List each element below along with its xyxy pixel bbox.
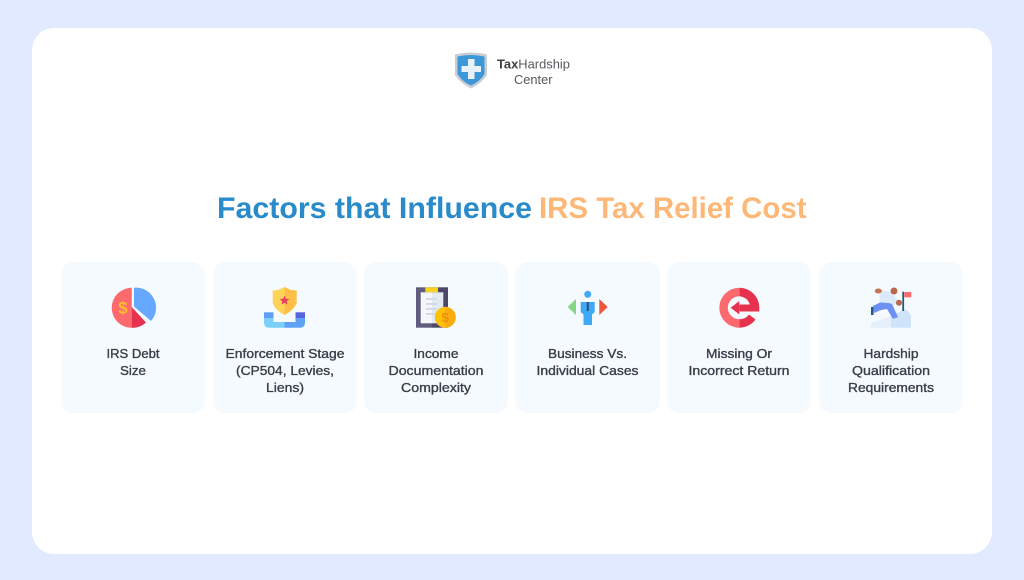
title: Factors that Influence	[217, 192, 532, 225]
label: IRS Debt	[106, 346, 160, 361]
label	[388, 346, 484, 395]
icon: climber with flag	[871, 288, 911, 328]
title: IRS Tax Relief Cost	[539, 192, 807, 225]
panel: Missing Or Incorrect Return	[667, 262, 811, 413]
icon: clipboard with coin: $	[442, 310, 450, 325]
panel: Income Documentation Complexity	[364, 262, 508, 413]
label: Size	[120, 363, 146, 378]
label: Individual Cases	[536, 363, 639, 378]
label: Complexity	[401, 380, 472, 395]
icon: pie chart with dollar	[112, 288, 156, 328]
label	[106, 346, 160, 378]
label	[536, 346, 639, 378]
panel: IRS Debt Size	[61, 262, 205, 413]
label	[226, 346, 344, 395]
icon: person between arrows	[568, 291, 608, 325]
icon: clipboard with coin	[416, 287, 456, 328]
label	[848, 346, 935, 395]
label: Requirements	[848, 380, 935, 395]
panel: Hardship Qualification Requirements	[819, 262, 963, 413]
logo	[455, 52, 570, 88]
logo text: Center	[514, 72, 553, 87]
icon: shield over tray	[264, 287, 305, 328]
label: Income	[414, 346, 458, 361]
panel: Enforcement Stage	[213, 262, 357, 413]
icon: e with return arrow	[719, 288, 759, 328]
label: Documentation	[388, 363, 484, 378]
logo text: TaxHardship	[497, 56, 570, 72]
label: (CP504, Levies,	[236, 363, 334, 378]
label: Business Vs.	[548, 346, 627, 361]
label: Hardship	[864, 346, 918, 361]
label: Missing Or	[706, 346, 773, 361]
logo text	[497, 56, 570, 87]
label	[688, 346, 790, 378]
icon: pie chart with dollar: $	[118, 298, 128, 318]
panel: Business Vs. Individual Cases	[515, 262, 660, 413]
label: Enforcement Stage	[226, 346, 344, 361]
title	[217, 192, 807, 225]
label: Liens)	[266, 380, 304, 395]
label: Qualification	[852, 363, 930, 378]
icon: logo shield	[455, 52, 487, 88]
label: Incorrect Return	[688, 363, 790, 378]
